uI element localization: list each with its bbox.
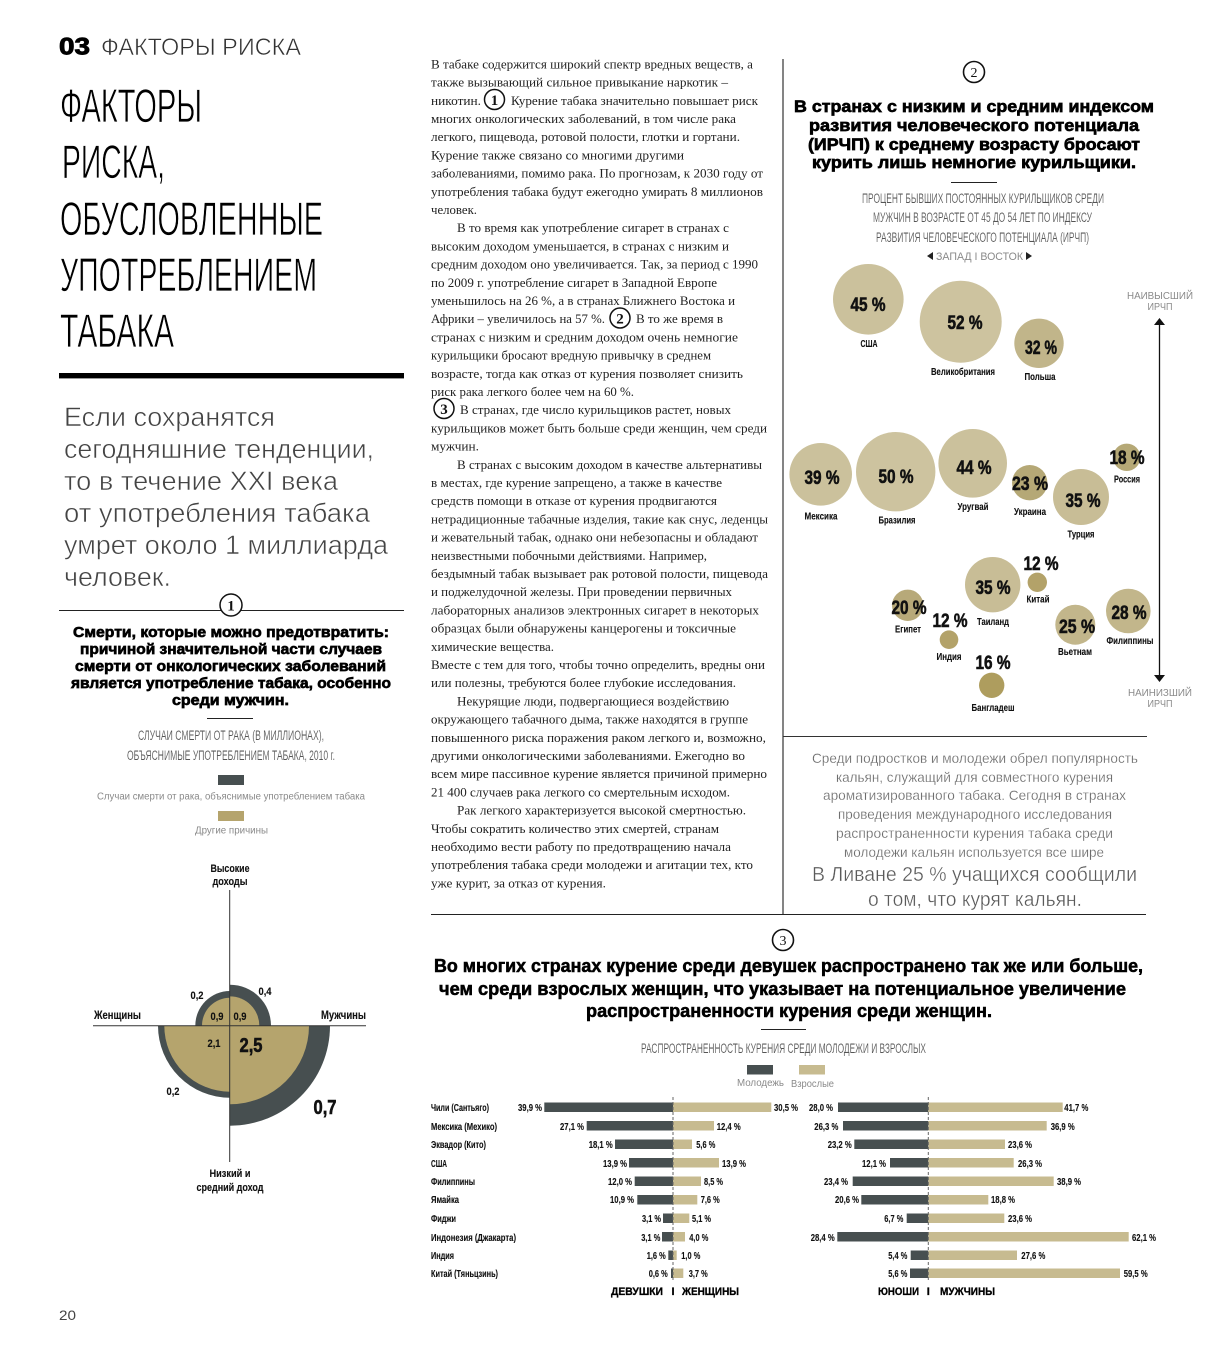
body text column: В то же время в: [636, 311, 723, 326]
heading: girls smoking: распространенности курения среди женщин.: [586, 1000, 992, 1021]
bar chart: girls and women: 3,1 %: [641, 1233, 660, 1244]
bar chart: boys and men: 41,7 %: [1064, 1103, 1088, 1114]
title: ОБУСЛОВЛЕННЫЕ: [60, 192, 323, 245]
body text column: Курение табака значительно повышает риск: [511, 93, 759, 108]
body text column: уменьшилось на 26 %, а в странах Ближнего Востока и: [431, 293, 735, 308]
quote: [64, 402, 389, 592]
bar chart: boys and men: 5,4 %: [888, 1251, 907, 1262]
body text column: [431, 56, 768, 890]
bubble values: 50 %: [878, 466, 914, 488]
subtitle: [862, 191, 1104, 245]
bar chart: girls and women: I: [672, 1286, 675, 1298]
icon: number 3: [772, 930, 794, 950]
bubble country labels: Индия: [936, 652, 962, 663]
bar chart: boys and men: 23,6 %: [1008, 1214, 1032, 1225]
bar chart: girls and women: 0,6 %: [649, 1269, 668, 1280]
subtitle: ОБЪЯСНИМЫЕ УПОТРЕБЛЕНИЕМ ТАБАКА, 2010 г.: [127, 748, 335, 763]
text block: hookah: ароматизированного табака. Сегодня в странах: [823, 787, 1126, 803]
polar semicircle chart: 0,9: [210, 1011, 224, 1023]
body text column: Некурящие люди, подвергающиеся воздействию: [457, 693, 729, 708]
bubble country labels: Россия: [1114, 474, 1140, 486]
heading: preventable deaths: Смерти, которые можно предотвратить:: [73, 624, 389, 641]
body text column: Вместе с тем для того, чтобы точно определить, вредны они: [431, 657, 765, 672]
bubble country labels: Мексика: [804, 512, 838, 522]
icon: number 1: [220, 594, 242, 616]
polar semicircle chart: 0,9: [234, 1011, 246, 1023]
body text column: и поджелудочной железы. При проведении первичных: [431, 584, 732, 599]
bubble country labels: Таиланд: [977, 617, 1009, 628]
bar chart: girls and women: 10,9 %: [610, 1195, 634, 1206]
icon: inline number 3: 3: [440, 402, 448, 418]
text block: hookah: кальян, служащий для совместного курения: [836, 769, 1113, 785]
bubble country labels: [804, 339, 1154, 714]
bubble country labels: Филиппины: [1106, 636, 1154, 647]
body text column: употребления табака среди молодежи и агитации тех, кто: [431, 857, 753, 872]
bar chart: girls and women: 1,0 %: [681, 1251, 700, 1262]
subtitle: РАСПРОСТРАНЕННОСТЬ КУРЕНИЯ СРЕДИ МОЛОДЕЖИ И ВЗРОСЛЫХ: [641, 1041, 926, 1056]
body text column: странах с низким и средним доходом очень немногие: [431, 329, 738, 344]
body text column: также вызывающий сильное привыкание наркотик –: [431, 75, 728, 90]
body text column: неизвестными побочными действиями. Например,: [431, 548, 707, 563]
bubble values: 12 %: [1024, 553, 1058, 575]
bar chart: boys and men: 23,4 %: [824, 1177, 848, 1188]
arrow: HDI axis: [1127, 289, 1193, 710]
icon: number 2: 2: [970, 66, 978, 81]
bar chart: girls and women: 7,6 %: [701, 1195, 720, 1206]
bar chart: boys and men: ЮНОШИ: [878, 1286, 919, 1298]
bubble values: 23 %: [1012, 473, 1048, 495]
title: ТАБАКА: [60, 304, 174, 357]
arrow: HDI axis: НАИВЫСШИЙ: [1127, 289, 1193, 302]
bar chart: boys and men: I: [927, 1286, 930, 1298]
body text column: уже курит, за отказ от курения.: [431, 875, 606, 890]
text block: hookah: [812, 750, 1138, 911]
bar chart: boys and men: 23,2 %: [828, 1140, 852, 1151]
bar chart: boys and men: МУЖЧИНЫ: [940, 1286, 995, 1298]
body text column: окружающего табачного дыма, также находятся в группе: [431, 712, 748, 727]
bar chart: boys and men: 26,3 %: [814, 1122, 838, 1133]
heading: HDI: развития человеческого потенциала: [809, 117, 1140, 135]
bar chart: girls and women: 8,5 %: [704, 1177, 723, 1188]
polar semicircle chart: 2,5: [240, 1035, 262, 1057]
bar chart: girls and women: ДЕВУШКИ: [611, 1286, 663, 1298]
arrow: HDI axis: ИРЧП: [1148, 698, 1172, 710]
bar chart: boys and men: 62,1 %: [1132, 1233, 1156, 1244]
body text column: средств помощи в отказе от курения продвигаются: [431, 493, 717, 508]
icon: number 3: 3: [780, 934, 786, 949]
polar semicircle chart: 2,1: [208, 1038, 220, 1050]
bar chart: boys and men: 12,1 %: [862, 1159, 886, 1170]
section header: 03: [59, 34, 90, 60]
bar chart: girls and women: 5,1 %: [692, 1214, 711, 1225]
icon: inline number 3: [434, 398, 454, 418]
text block: hookah: Среди подростков и молодежи обрел популярность: [812, 750, 1138, 766]
bubble values: 18 %: [1110, 447, 1144, 469]
body text column: Рак легкого характеризуется высокой смертностью.: [457, 803, 746, 818]
title: РИСКА,: [62, 135, 165, 188]
bubble country labels: Турция: [1068, 530, 1095, 540]
text block: hookah: распространенности курения табака среди: [836, 825, 1113, 841]
title: [60, 79, 323, 357]
text block: hookah: проведения международного исследования: [838, 806, 1112, 822]
body text column: В странах с высоким доходом в качестве альтернативы: [457, 457, 762, 472]
bar chart: girls and women: 4,0 %: [689, 1233, 708, 1244]
bar chart: boys and men: 26,3 %: [1018, 1159, 1042, 1170]
body text column: в местах, где курение запрещено, а также в качестве: [431, 475, 722, 490]
body text column: химические вещества.: [431, 639, 554, 654]
arrow: HDI axis: ИРЧП: [1148, 301, 1172, 313]
bar chart: girls and women: 30,5 %: [774, 1103, 798, 1114]
body text column: курильщики бросают вредную привычку в среднем: [431, 348, 711, 363]
title: ФАКТОРЫ: [60, 79, 202, 132]
bar chart: girls and women: 18,1 %: [589, 1140, 613, 1151]
body text column: В то время как употребление сигарет в странах с: [457, 220, 729, 235]
quote: Если сохранятся: [64, 402, 275, 432]
bubble country labels: Великобритания: [931, 366, 995, 378]
legend: Другие причины: [195, 826, 268, 836]
bubble values: 35 %: [976, 577, 1010, 599]
polar semicircle chart: 0,2: [190, 990, 204, 1002]
polar semicircle chart: Мужчины: [321, 1010, 366, 1022]
body text column: бездымный табак вызывает рак ротовой полости, пищевода: [431, 566, 768, 581]
body text column: всем мире пассивное курение является причиной примерно: [431, 766, 767, 781]
icon: inline number 1: [484, 90, 504, 110]
heading: preventable deaths: среди мужчин.: [172, 692, 289, 709]
heading: girls smoking: Во многих странах курение среди девушек распространено так же или больше,: [434, 955, 1143, 976]
bar chart: boys and men: 28,0 %: [809, 1103, 833, 1114]
bubble country labels: Китай: [1026, 594, 1050, 606]
icon: number 2: [964, 62, 984, 82]
bubble values: 20 %: [892, 597, 926, 619]
row labels: Ямайка: [431, 1195, 459, 1206]
bar chart: boys and men: 38,9 %: [1057, 1177, 1081, 1188]
body text column: Курение также связано со многими другими: [431, 147, 684, 162]
body text column: курильщиков может быть больше среди женщин, чем среди: [431, 420, 767, 435]
bubble values: 52 %: [948, 312, 982, 334]
row labels: Фиджи: [431, 1214, 456, 1225]
bubbles: [789, 264, 1151, 698]
bubble values: [804, 294, 1146, 674]
heading: girls smoking: чем среди взрослых женщин, что указывает на потенциальное увеличение: [439, 978, 1126, 999]
icon: inline number 2: [610, 308, 630, 328]
bubble country labels: Польша: [1024, 372, 1056, 383]
polar semicircle chart: 0,2: [166, 1086, 180, 1098]
bar chart: girls and women: 12,0 %: [608, 1177, 632, 1188]
polar semicircle chart: Низкий и: [210, 1168, 250, 1180]
body text column: и жевательный табак, однако они небезопасны и обладают: [431, 530, 758, 545]
heading: preventable deaths: [71, 624, 391, 709]
bar chart: boys and men: 27,6 %: [1021, 1251, 1045, 1262]
heading: preventable deaths: является употребление табака, особенно: [71, 675, 391, 692]
bar chart: girls and women: 1,6 %: [647, 1251, 666, 1262]
body text column: или полезны, требуются более глубокие исследования.: [431, 675, 736, 690]
body text column: повышенного риска поражения раком легкого и, возможно,: [431, 730, 766, 745]
heading: girls smoking: [434, 955, 1143, 1021]
bubble country labels: Бразилия: [878, 516, 916, 526]
body text column: В странах, где число курильщиков растет, новых: [460, 402, 732, 417]
body text column: 21 400 случаев рака легкого со смертельным исходом.: [431, 784, 730, 799]
panel: HDI bubble chart: [789, 62, 1193, 714]
bar chart: boys and men: 18,8 %: [991, 1195, 1015, 1206]
body text column: мужчин.: [431, 439, 479, 454]
polar semicircle chart: 0,4: [258, 986, 272, 998]
text block: hookah: В Ливане 25 % учащихся сообщили: [812, 864, 1137, 886]
quote: то в течение XXI века: [64, 466, 339, 496]
heading: HDI: курить лишь немногие курильщики.: [812, 154, 1136, 172]
body text column: лабораторных анализов электронных сигарет в некоторых: [431, 602, 760, 617]
heading: HDI: В странах с низким и средним индексом: [794, 98, 1154, 116]
row labels: Филиппины: [431, 1177, 475, 1188]
row labels: Чили (Сантьяго): [431, 1103, 489, 1114]
row labels: Эквадор (Кито): [431, 1140, 486, 1151]
bar chart: girls and women: 13,9 %: [603, 1159, 627, 1170]
polar semicircle chart: 0,7: [314, 1097, 336, 1119]
body text column: многих онкологических заболеваний, в том числе рака: [431, 111, 736, 126]
quote: от употребления табака: [64, 498, 371, 528]
bubble country labels: США: [860, 339, 878, 350]
body text column: средним доходом оно увеличивается. Так, за период с 1990: [431, 257, 758, 272]
bubble country labels: Вьетнам: [1058, 647, 1092, 658]
bubble values: 35 %: [1066, 490, 1100, 512]
bar chart: girls and women: 13,9 %: [722, 1159, 746, 1170]
icon: inline number 1: 1: [491, 93, 498, 109]
body text column: легкого, пищевода, ротовой полости, глотки и гортани.: [431, 129, 740, 144]
row labels: Китай (Тяньцзинь): [431, 1269, 498, 1280]
heading: preventable deaths: причиной значительной части случаев: [80, 641, 382, 658]
bar chart: boys and men: 6,7 %: [884, 1214, 903, 1225]
body text column: по 2009 г. употребление сигарет в Западной Европе: [431, 275, 717, 290]
bar chart: girls and women: [518, 1097, 798, 1298]
row labels: Индия: [431, 1251, 454, 1262]
bar chart: boys and men: 5,6 %: [888, 1269, 907, 1280]
icon: number 1: 1: [227, 598, 235, 614]
text block: hookah: о том, что курят кальян.: [868, 889, 1082, 911]
bar chart: boys and men: 36,9 %: [1051, 1122, 1075, 1133]
row labels: Индонезия (Джакарта): [431, 1233, 516, 1244]
subtitle: РАЗВИТИЯ ЧЕЛОВЕЧЕСКОГО ПОТЕНЦИАЛА (ИРЧП): [876, 230, 1089, 245]
body text column: Африки – увеличилось на 57 %.: [431, 311, 605, 326]
quote: умрет около 1 миллиарда: [64, 530, 389, 560]
body text column: другими онкологическими заболеваниями. Ежегодно во: [431, 748, 745, 763]
bar chart: boys and men: [809, 1097, 1156, 1298]
polar semicircle chart: средний доход: [196, 1182, 264, 1194]
body text column: Чтобы сократить количество этих смертей, странам: [431, 821, 719, 836]
heading: HDI: (ИРЧП) к среднему возрасту бросают: [808, 136, 1140, 154]
page number: 20: [59, 1307, 76, 1323]
bar chart: boys and men: 28,4 %: [811, 1233, 835, 1244]
bubble country labels: Египет: [895, 624, 921, 636]
heading: preventable deaths: смерти от онкологических заболеваний: [75, 658, 386, 675]
bar chart: girls and women: 12,4 %: [717, 1122, 741, 1133]
bubble values: 32 %: [1025, 337, 1057, 359]
bar chart: girls and women: 3,1 %: [642, 1214, 661, 1225]
bubble values: 44 %: [956, 457, 992, 479]
body text column: образцах были обнаружены канцерогены и токсичные: [431, 621, 736, 636]
bar chart: boys and men: 23,6 %: [1008, 1140, 1032, 1151]
row labels: Мексика (Мехико): [431, 1122, 497, 1133]
legend: [737, 1065, 834, 1090]
bar chart: boys and men: 59,5 %: [1124, 1269, 1148, 1280]
arrow: HDI axis: НАИНИЗШИЙ: [1128, 686, 1192, 699]
bubble country labels: Уругвай: [958, 502, 988, 513]
polar semicircle chart: Высокие: [210, 863, 250, 875]
body text column: высоким доходом уменьшается, в странах с низким и: [431, 238, 729, 253]
bar chart: girls and women: 27,1 %: [560, 1122, 584, 1133]
legend: Взрослые: [791, 1079, 834, 1090]
bubble values: 39 %: [804, 467, 840, 489]
body text column: риск рака легкого более чем на 60 %.: [431, 384, 634, 399]
bar chart: girls and women: 39,9 %: [518, 1103, 542, 1114]
body text column: никотин.: [431, 93, 481, 108]
bar chart: girls and women: ЖЕНЩИНЫ: [681, 1286, 739, 1298]
panel: youth and adult smoking: [431, 930, 1156, 1298]
bubble values: 25 %: [1059, 616, 1095, 638]
icon: inline number 2: 2: [616, 312, 624, 328]
bar chart: girls and women: 3,7 %: [689, 1269, 708, 1280]
legend: [97, 775, 365, 836]
bubble values: 28 %: [1112, 602, 1146, 624]
heading: HDI: [794, 98, 1154, 172]
body text column: необходимо вести работу по предотвращению начала: [431, 839, 731, 854]
title: УПОТРЕБЛЕНИЕМ: [60, 248, 317, 301]
legend: Молодежь: [737, 1078, 784, 1089]
row labels: [431, 1103, 516, 1280]
bar chart: boys and men: 20,6 %: [835, 1195, 859, 1206]
quote: человек.: [64, 562, 171, 592]
polar semicircle chart: [93, 863, 366, 1194]
body text column: заболеваниями, помимо рака. По прогнозам, к 2030 году от: [431, 166, 763, 181]
polar semicircle chart: Женщины: [93, 1010, 141, 1022]
bubble values: 12 %: [932, 610, 968, 632]
body text column: В табаке содержится широкий спектр вредных веществ, а: [431, 56, 753, 71]
panel: deaths chart: [59, 594, 404, 1194]
text block: hookah: молодежи кальян используется все шире: [844, 844, 1104, 860]
subtitle: [127, 728, 335, 763]
legend: Случаи смерти от рака, объяснимые употреблением табака: [97, 790, 365, 802]
body text column: человек.: [431, 202, 477, 217]
subtitle: МУЖЧИН В ВОЗРАСТЕ ОТ 45 ДО 54 ЛЕТ ПО ИНДЕКСУ: [873, 210, 1092, 225]
row labels: США: [431, 1159, 447, 1170]
bubble values: 16 %: [976, 652, 1010, 674]
body text column: нетрадиционные табачные изделия, такие как снус, леденцы: [431, 511, 768, 526]
body text column: употребления табака будут ежегодно умирать 8 миллионов: [431, 184, 763, 199]
polar semicircle chart: доходы: [212, 876, 248, 888]
quote: сегодняшние тенденции,: [64, 434, 374, 464]
bubble country labels: Бангладеш: [972, 703, 1014, 714]
body text column: возрасте, тогда как отказ от курения позволяет снизить: [431, 366, 743, 381]
bar chart: girls and women: 5,6 %: [696, 1140, 715, 1151]
section header: ФАКТОРЫ РИСКА: [101, 34, 302, 61]
bubble values: 45 %: [850, 294, 886, 316]
subtitle: СЛУЧАИ СМЕРТИ ОТ РАКА (В МИЛЛИОНАХ),: [138, 728, 324, 743]
west east label: ЗАПАД I ВОСТОК: [936, 251, 1024, 263]
bubble country labels: Украина: [1014, 507, 1046, 518]
